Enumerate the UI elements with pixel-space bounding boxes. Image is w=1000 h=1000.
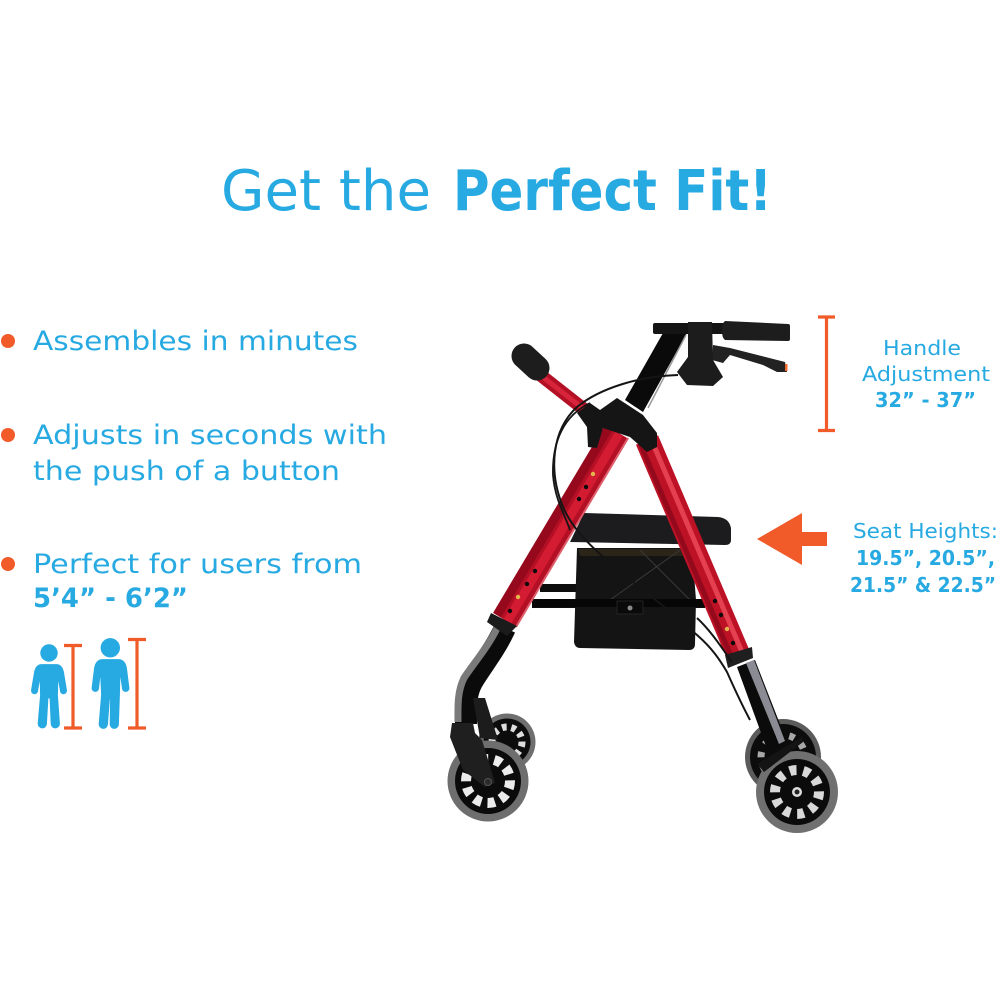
handle bar — [653, 323, 728, 334]
black handle post — [625, 333, 687, 412]
red crossing tube — [534, 370, 590, 414]
bullet: user heights — [1, 549, 362, 614]
storage bag — [532, 548, 705, 650]
front wheel left — [448, 723, 528, 822]
icon: short height bracket — [64, 646, 82, 728]
brake lever — [712, 345, 787, 372]
wheel brake assembly — [757, 737, 803, 772]
rear wheel left — [478, 714, 536, 770]
bullet: adjusts: the push of a button — [33, 456, 340, 487]
left tube sleeve — [487, 613, 517, 636]
handle adjustment bracket — [818, 317, 835, 430]
right tube sleeve — [725, 647, 753, 668]
bullet list — [1, 326, 387, 614]
brake cables — [553, 375, 750, 720]
icon: taller person — [92, 638, 129, 728]
rear wheel right — [745, 719, 821, 795]
front wheel right — [756, 751, 838, 833]
left hand grip — [524, 356, 537, 368]
handle adjustment label — [862, 336, 990, 412]
rear caster fork — [473, 698, 498, 740]
icon: two people with height brackets — [31, 638, 146, 728]
front left red tube — [497, 427, 628, 627]
adjustment holes — [508, 472, 735, 645]
bullet: user heights: 5’4” - 6’2” — [33, 583, 188, 614]
bullet: user heights: Perfect for users from — [33, 549, 362, 580]
handle adjustment label: 32” - 37” — [875, 388, 976, 412]
seat — [570, 513, 731, 545]
handle adjustment label: Adjustment — [862, 362, 990, 386]
seat height arrow — [757, 513, 827, 565]
icon: shorter person — [31, 645, 67, 728]
bullet: assembles: Assembles in minutes — [33, 326, 358, 357]
title: Get the — [221, 159, 431, 224]
icon: tall height bracket — [128, 640, 146, 728]
right red tube — [640, 439, 742, 656]
cross bars — [532, 584, 705, 608]
walker photo illustration — [448, 321, 838, 833]
folding bracket — [577, 398, 657, 452]
brake lever tip — [785, 364, 788, 371]
title: Perfect Fit! — [453, 159, 772, 224]
bullet: adjusts — [1, 420, 387, 487]
right lower black leg — [737, 660, 787, 752]
title — [221, 159, 772, 224]
seat heights label: 19.5”, 20.5”, — [856, 546, 995, 570]
left lower black leg — [458, 624, 505, 724]
handle adjustment label: Handle — [883, 336, 961, 360]
seat heights label: Seat Heights: — [853, 519, 998, 543]
bullet: adjusts: Adjusts in seconds with — [33, 420, 387, 451]
brake block — [677, 322, 723, 386]
right hand grip — [722, 321, 790, 341]
seat heights label — [850, 519, 998, 597]
post highlight — [648, 335, 686, 408]
